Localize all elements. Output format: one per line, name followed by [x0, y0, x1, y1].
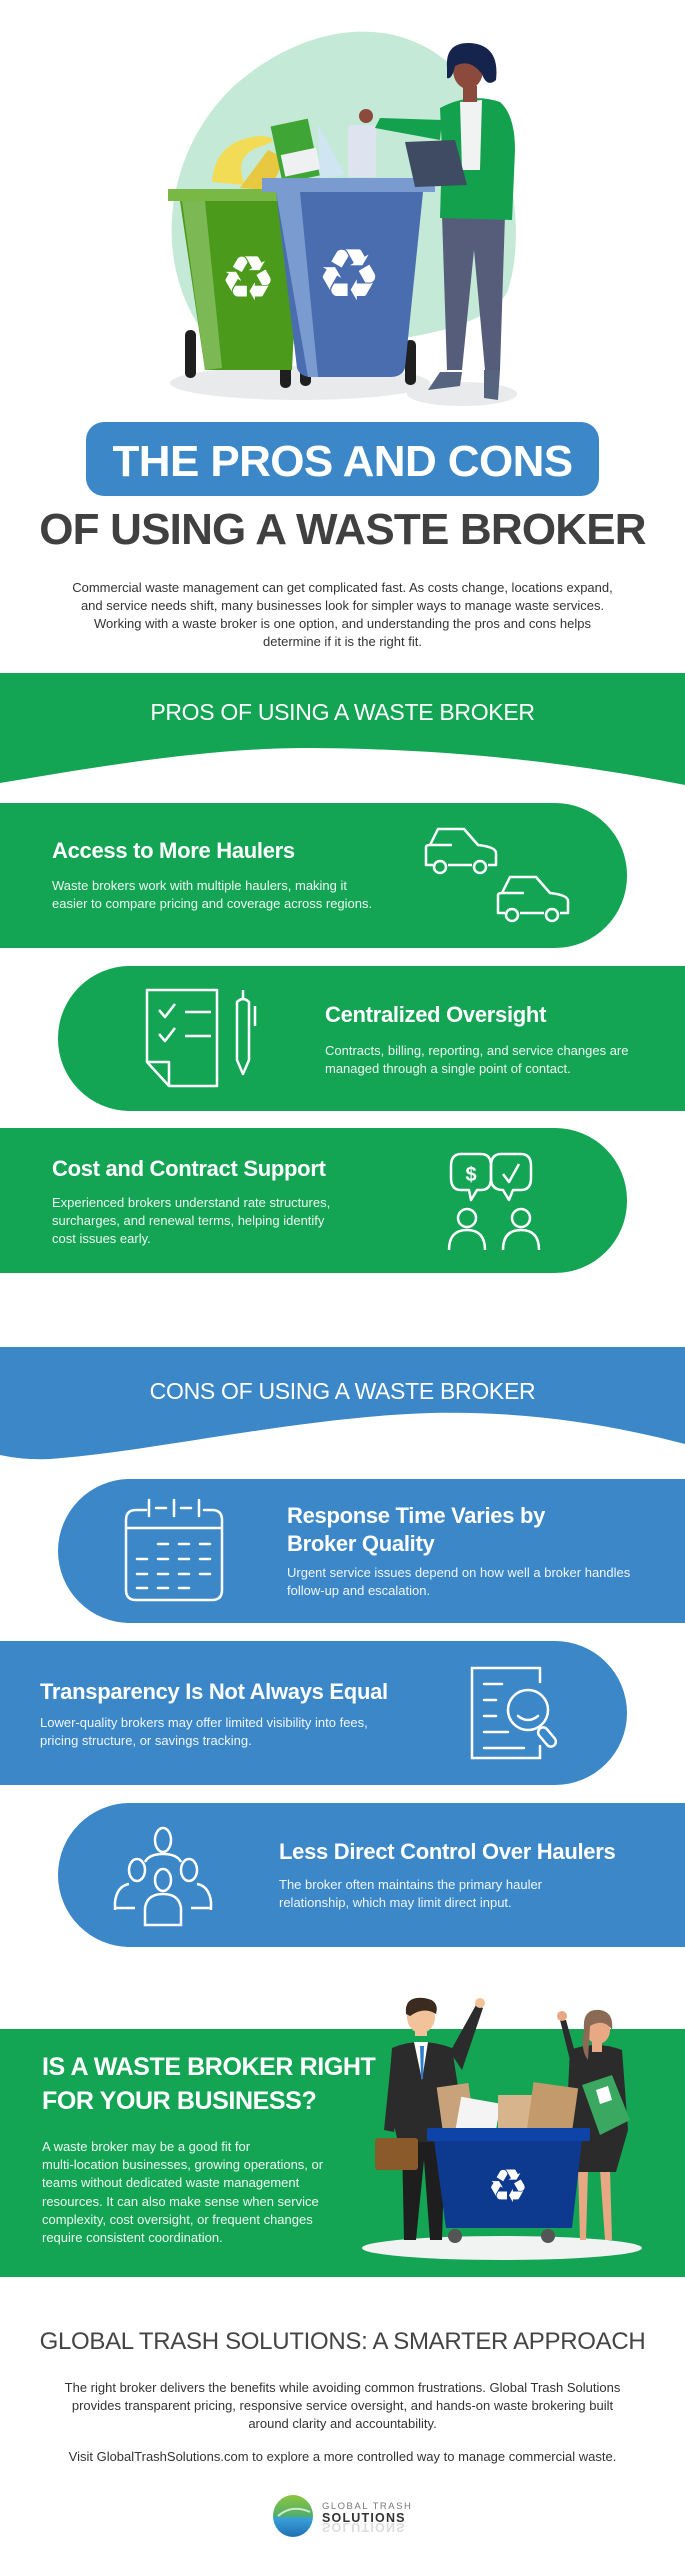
- pros header band: [0, 673, 685, 785]
- closing text: [64, 2380, 620, 2431]
- logo: global trash solutions: [273, 2495, 412, 2537]
- closing text: around clarity and accountability.: [248, 2416, 437, 2431]
- icon: chat bubbles and people: $: [465, 1164, 477, 1186]
- illustration: business people with recycling bin: [362, 1998, 642, 2260]
- logo: global trash solutions: GLOBAL TRASH: [322, 2501, 412, 2512]
- icon: group of people: [114, 1826, 212, 1926]
- section body: multi-location businesses, growing operations, or: [42, 2157, 323, 2172]
- con card: less direct control: relationship, which may limit direct input.: [279, 1895, 512, 1910]
- pro card: cost and contract support: [0, 1128, 627, 1273]
- pro card: centralized oversight: Centralized Oversight: [325, 1002, 546, 1027]
- con card: response time: Urgent service issues depend on how well a broker handles: [287, 1565, 630, 1580]
- section body: teams without dedicated waste management: [42, 2175, 299, 2190]
- hero illustration: recycling bins and woman: ♻: [317, 233, 381, 317]
- section heading: FOR YOUR BUSINESS?: [42, 2087, 316, 2115]
- closing text: The right broker delivers the benefits while avoiding common frustrations. Global Trash Solutions: [65, 2380, 620, 2395]
- pro card: access to more haulers: Waste brokers work with multiple haulers, making it: [52, 878, 347, 893]
- section body: [42, 2139, 323, 2245]
- logo: global trash solutions: SOLUTIONS: [322, 2520, 406, 2534]
- con card: transparency: Transparency Is Not Always Equal: [40, 1679, 388, 1704]
- section heading: IS A WASTE BROKER RIGHT: [42, 2053, 375, 2081]
- closing text: provides transparent pricing, responsive service oversight, and hands-on waste brokering built: [72, 2398, 613, 2413]
- con card: transparency: pricing structure, or savings tracking.: [40, 1733, 252, 1748]
- pro card: cost and contract support: Experienced brokers understand rate structures,: [52, 1195, 330, 1210]
- title: the pros and cons: [86, 422, 599, 496]
- section heading: [42, 2053, 376, 2115]
- icon: cars: [424, 828, 570, 922]
- intro text: determine if it is the right fit.: [263, 634, 422, 649]
- pro card: access to more haulers: [0, 803, 627, 948]
- hero illustration: recycling bins and woman: ♻: [220, 242, 276, 315]
- pro card: access to more haulers: easier to compare pricing and coverage across regions.: [52, 896, 372, 911]
- con card: response time: Broker Quality: [287, 1531, 434, 1556]
- pro card: cost and contract support: Cost and Contract Support: [52, 1156, 326, 1181]
- section body: A waste broker may be a good fit for: [42, 2139, 250, 2154]
- pro card: cost and contract support: cost issues early.: [52, 1231, 151, 1246]
- title line 2: OF USING A WASTE BROKER: [39, 505, 646, 554]
- cons header band: [0, 1347, 685, 1460]
- con card: transparency: [0, 1641, 627, 1785]
- con card: response time: [58, 1479, 685, 1623]
- section: is a waste broker right for your business: [0, 2029, 685, 2277]
- pro card: centralized oversight: [58, 966, 685, 1111]
- pro card: centralized oversight: managed through a single point of contact.: [325, 1061, 571, 1076]
- hero illustration: recycling bins and woman: [168, 32, 517, 406]
- intro text: Commercial waste management can get complicated fast. As costs change, locations expand,: [72, 580, 613, 595]
- intro text: Working with a waste broker is one option, and understanding the pros and cons helps: [94, 616, 591, 631]
- intro text: and service needs shift, many businesses look for simpler ways to manage waste services.: [81, 598, 604, 613]
- call to action: Visit GlobalTrashSolutions.com to explore a more controlled way to manage commercial waste.: [69, 2449, 616, 2464]
- con card: response time: follow-up and escalation.: [287, 1583, 430, 1598]
- pro card: access to more haulers: Access to More Haulers: [52, 838, 295, 863]
- pro card: cost and contract support: surcharges, and renewal terms, helping identify: [52, 1213, 324, 1228]
- section body: complexity, cost oversight, or frequent changes: [42, 2212, 313, 2227]
- cons heading: CONS OF USING A WASTE BROKER: [150, 1378, 535, 1404]
- icon: calendar: [124, 1498, 224, 1602]
- con card: less direct control: [58, 1803, 685, 1947]
- title: the pros and cons: THE PROS AND CONS: [112, 437, 572, 486]
- section body: resources. It can also make sense when service: [42, 2194, 319, 2209]
- intro text: [72, 580, 613, 649]
- closing heading: GLOBAL TRASH SOLUTIONS: A SMARTER APPROACH: [40, 2328, 645, 2355]
- con card: transparency: Lower-quality brokers may offer limited visibility into fees,: [40, 1715, 368, 1730]
- con card: response time: Response Time Varies by: [287, 1503, 545, 1528]
- icon: chat bubbles and people: [448, 1152, 540, 1250]
- section body: require consistent coordination.: [42, 2230, 223, 2245]
- con card: less direct control: Less Direct Control Over Haulers: [279, 1839, 615, 1864]
- con card: less direct control: The broker often maintains the primary hauler: [279, 1877, 542, 1892]
- logo: global trash solutions: SOLUTIONS: [322, 2511, 406, 2525]
- icon: document with magnifier: [470, 1666, 558, 1760]
- illustration: business people with recycling bin: ♻: [487, 2159, 529, 2213]
- icon: checklist and pen: [146, 988, 256, 1088]
- pros heading: PROS OF USING A WASTE BROKER: [150, 699, 535, 725]
- pro card: centralized oversight: Contracts, billing, reporting, and service changes are: [325, 1043, 628, 1058]
